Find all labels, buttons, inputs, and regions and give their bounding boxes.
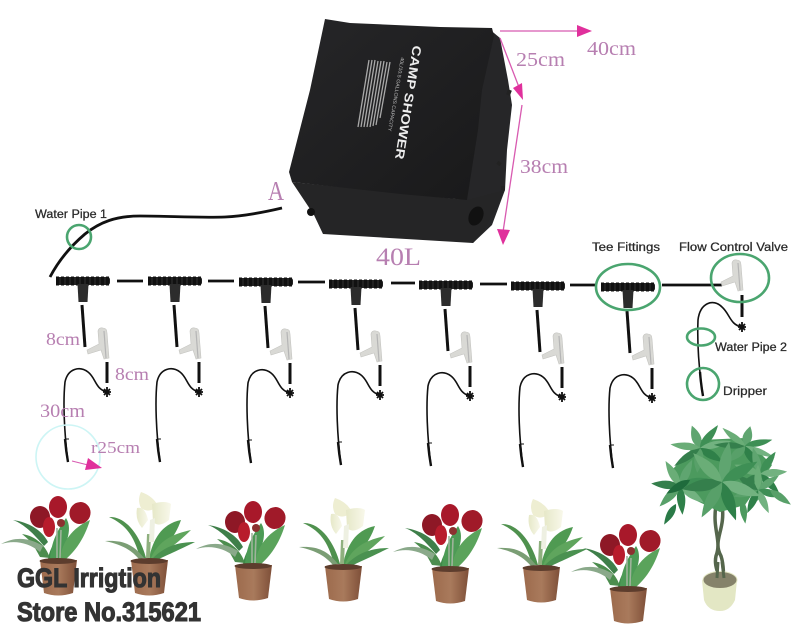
ring: dripper	[687, 368, 719, 400]
dimension label: 8cm outlet: 8cm	[115, 364, 149, 384]
radius arrow	[72, 458, 102, 470]
potted tulip 5	[393, 504, 486, 604]
dimension label: 40cm: 40cm	[587, 38, 636, 60]
label: water pipe 2: Water Pipe 2	[715, 342, 787, 354]
dripper set 5	[419, 281, 474, 466]
dripper set 2	[148, 277, 203, 462]
tree soil	[703, 572, 737, 588]
potted tulip 1	[1, 496, 94, 596]
store number: Store No.315621	[17, 597, 201, 627]
bag fitting left	[307, 208, 315, 216]
bag edge knobs	[498, 90, 510, 190]
potted tulip 7	[571, 524, 664, 624]
dimension label: r25cm: r25cm	[91, 438, 140, 457]
dripper set 6	[511, 282, 566, 467]
main supply line	[117, 281, 722, 285]
dripper set 4	[329, 280, 384, 465]
camp shower water bag	[289, 19, 512, 243]
label: water pipe 1: Water Pipe 1	[35, 209, 107, 221]
dripper set 1	[56, 277, 111, 462]
bag front panel	[289, 19, 494, 200]
label: tee fittings: Tee Fittings	[592, 242, 660, 254]
store name: GGL Irrigtion	[17, 563, 161, 593]
tree trunk	[715, 505, 724, 578]
ring: flow control valve	[711, 254, 769, 302]
potted white flower 4	[299, 498, 389, 602]
dimension arrow: 38cm	[497, 105, 522, 245]
dimension label: 25cm: 25cm	[516, 49, 565, 71]
dimension arrow: 40cm	[500, 25, 592, 37]
label: A: A	[268, 176, 284, 206]
dripper set 3	[239, 278, 294, 463]
ring: water pipe 1	[67, 225, 91, 249]
potted white flower 6	[497, 499, 587, 602]
dimension arrow: 25cm	[500, 38, 523, 100]
capacity print: 40L/10.5 GALLONS CAPACITY	[386, 57, 405, 132]
label: flow control valve: Flow Control Valve	[679, 242, 788, 254]
potted tulip 3	[196, 501, 289, 600]
water pipe 1	[50, 208, 282, 277]
instruction print block	[358, 60, 390, 127]
camp shower print: CAMP SHOWER	[392, 45, 424, 160]
ring: water pipe 2	[687, 328, 715, 346]
tree foliage	[642, 414, 794, 529]
money tree	[642, 414, 794, 611]
bag bottom panel	[292, 182, 505, 243]
dimension label: 30cm: 30cm	[40, 401, 85, 422]
dripper set 7	[601, 283, 656, 468]
dimension label: 8cm stem: 8cm	[46, 329, 80, 349]
bag side panel	[458, 28, 512, 243]
tree pot	[702, 580, 737, 611]
wetting radius circle	[36, 425, 100, 489]
label: dripper: Dripper	[723, 386, 767, 398]
bag fitting right	[465, 204, 487, 228]
label: 40L: 40L	[376, 244, 421, 271]
ring: tee fittings	[596, 264, 660, 310]
dimension label: 38cm: 38cm	[520, 156, 568, 178]
potted white flower 2	[105, 492, 195, 596]
store label	[17, 563, 201, 627]
legend assembly: valve and dripper	[698, 260, 746, 396]
